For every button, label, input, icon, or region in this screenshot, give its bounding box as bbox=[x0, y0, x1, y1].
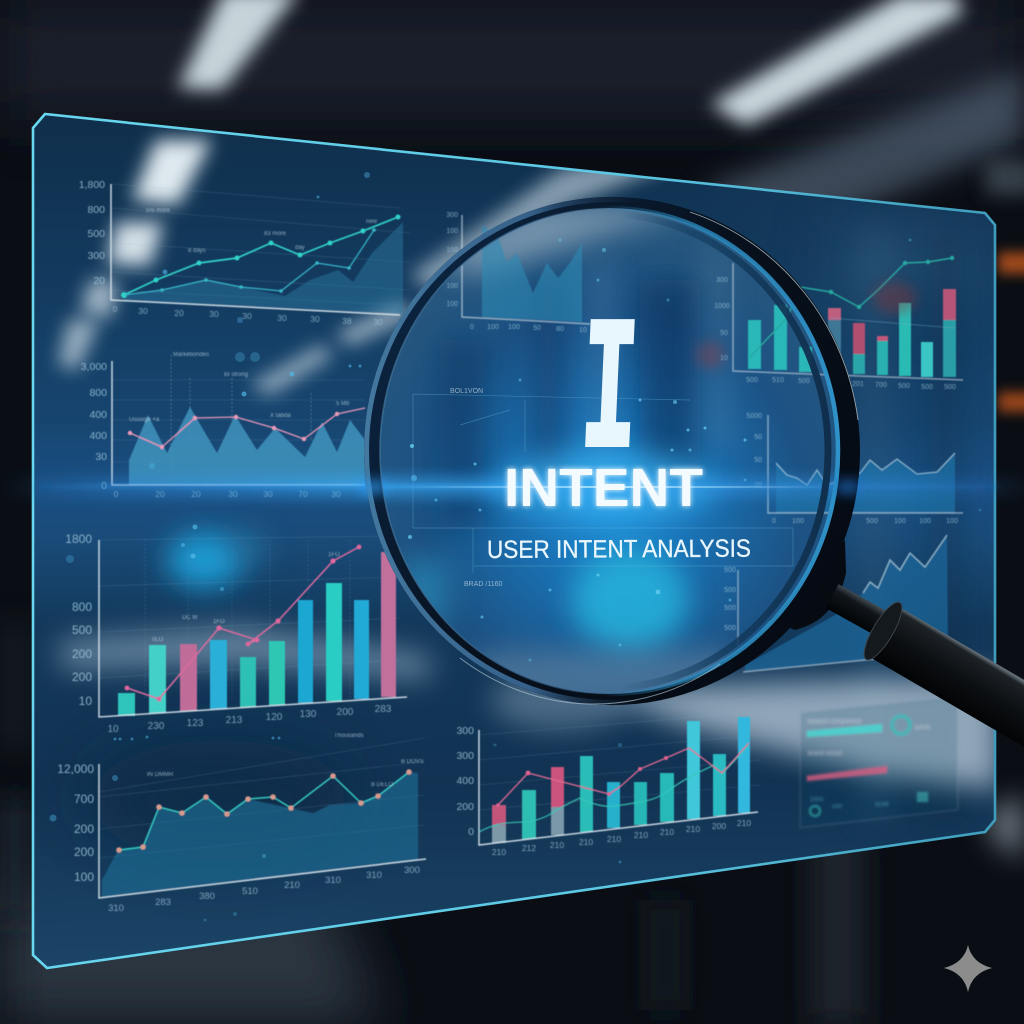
horizontal light flare bbox=[0, 476, 1024, 498]
chart: mountain area with pink line: 800 bbox=[89, 387, 107, 399]
chart: mountain area with pink line: BI strong bbox=[224, 372, 248, 378]
chart: area line with orange markers: 100 bbox=[74, 870, 94, 884]
panel: magnifier glass view: BOL1VON bbox=[450, 388, 483, 395]
mini status panel: Brand Vision bbox=[808, 751, 842, 757]
chart: lower-centre bars: 210 bbox=[737, 818, 751, 828]
bars bbox=[118, 552, 396, 716]
chart: right lower area bbox=[724, 535, 948, 672]
line series teal bbox=[121, 214, 400, 298]
chart: top-left line chart: 30 bbox=[277, 313, 287, 323]
chart: bars with pink trend: 283 bbox=[375, 704, 392, 715]
chart: right stacked bars: 300 bbox=[716, 277, 728, 284]
chart: bars with pink trend: 213 bbox=[226, 715, 243, 726]
chart: lower-centre bars: 210 bbox=[492, 847, 506, 857]
chart: right stacked bars: 1000 bbox=[714, 303, 730, 310]
chart: area line with orange markers bbox=[57, 738, 426, 914]
chart: right stacked bars: 510 bbox=[772, 377, 784, 384]
chart: bars with pink trend: 0LO bbox=[152, 637, 164, 643]
teal curve bbox=[479, 745, 749, 832]
mini status panel: 1000 bbox=[810, 797, 824, 803]
chart: top-left line chart: 30 bbox=[310, 314, 320, 324]
chart: top-left line chart: 300 bbox=[87, 250, 105, 262]
chart: area line with orange markers: IN DMMR bbox=[147, 772, 174, 778]
chart: area line with orange markers: 210 bbox=[284, 880, 300, 891]
chart: top-left line chart: 20 bbox=[174, 308, 184, 318]
chart: top-left line chart: new bbox=[366, 219, 378, 225]
chart: bars with pink trend: 200 bbox=[337, 707, 354, 718]
chart: top-left line chart: 800 bbox=[87, 204, 105, 216]
chart: mountain area with pink line: 30 bbox=[331, 489, 341, 499]
chart: bars with pink trend: 120 bbox=[266, 712, 283, 723]
pink line bbox=[496, 743, 749, 807]
chart: right middle area: 100 bbox=[792, 518, 804, 525]
chart: area line with orange markers: 310 bbox=[366, 870, 382, 881]
chart: mountain area with pink line bbox=[81, 352, 365, 499]
panel reflections bbox=[58, 140, 1000, 860]
chart: lower-centre bars: 200 bbox=[456, 801, 474, 813]
chart: mountain area with pink line: 30 bbox=[228, 489, 238, 499]
chart: lens top-centre area: 80 bbox=[556, 326, 564, 333]
chart: mountain area with pink line: 20 bbox=[191, 489, 201, 499]
chart: right middle area: 0 bbox=[772, 518, 776, 525]
chart: area line with orange markers: 380 bbox=[199, 891, 215, 902]
chart: top-left line chart: 8 days bbox=[188, 248, 206, 254]
lens blurred background bbox=[400, 205, 730, 710]
bars bbox=[748, 289, 956, 377]
chart: lens top-centre area: 100 bbox=[446, 228, 458, 235]
mini status panel: location comparison bbox=[808, 719, 861, 725]
pink line bbox=[128, 408, 365, 449]
chart: top-left line chart bbox=[79, 179, 410, 327]
chart: right middle area: 500 bbox=[866, 518, 878, 525]
orange blurred lights bbox=[998, 252, 1024, 274]
chart: top-left line chart: 1,800 bbox=[79, 179, 105, 191]
magnifier handle bbox=[770, 540, 1024, 740]
panel: magnifier glass view bbox=[380, 205, 838, 710]
chart: lower-centre bars: 210 bbox=[607, 834, 621, 844]
chart: bars with pink trend: 1800 bbox=[65, 532, 92, 546]
cyan inner arc bbox=[380, 208, 838, 694]
chart: bars with pink trend: 230 bbox=[148, 721, 165, 732]
mini status panel: SUM bbox=[875, 802, 888, 808]
thin highlight bbox=[690, 212, 858, 420]
chart: right stacked bars: 500 bbox=[921, 384, 933, 391]
chart: bars with pink trend: 200 bbox=[72, 670, 92, 684]
hub collar bbox=[770, 540, 846, 630]
italic slab I glyph: I bbox=[577, 288, 642, 502]
dark inner bevel bbox=[384, 214, 828, 688]
neck bbox=[832, 596, 884, 625]
chart: mountain area with pink line: Marketiondes bbox=[173, 352, 209, 358]
chart: lens top-centre area: 100 bbox=[508, 324, 520, 331]
chart: right middle area: 5000 bbox=[746, 413, 762, 420]
ceiling light left bbox=[178, 0, 300, 90]
mini status panel: DATA bbox=[915, 725, 930, 731]
chart: mountain area with pink line: 20 bbox=[155, 489, 165, 499]
chart: area line with orange markers: 300 bbox=[404, 865, 420, 876]
chart: lens top-centre area: 0 bbox=[470, 324, 474, 331]
chart: right lower area: 500 bbox=[724, 605, 736, 612]
chart: lower-centre bars: 210 bbox=[634, 830, 648, 840]
teal line bbox=[750, 256, 954, 357]
chart: lower-centre bars: 210 bbox=[550, 840, 564, 850]
chart: area line with orange markers: 310 bbox=[325, 875, 341, 886]
chart: bars with pink trend: 800 bbox=[72, 600, 92, 614]
chart: lens top-centre area bbox=[446, 212, 590, 334]
line with markers bbox=[116, 769, 412, 853]
chart: right stacked bars: 500 bbox=[798, 378, 810, 385]
chart: lower-centre bars: 300 bbox=[456, 750, 474, 762]
chart: area line with orange markers: 510 bbox=[242, 886, 258, 897]
chart: area line with orange markers: 700 bbox=[74, 792, 94, 806]
chart: top-left line chart: 5% more bbox=[146, 208, 171, 214]
chart: area line with orange markers: 200 bbox=[74, 845, 94, 859]
chart: mountain area with pink line: 30 bbox=[95, 451, 107, 463]
chart: lower-centre bars bbox=[456, 712, 760, 857]
chart: right middle area: 50 bbox=[754, 457, 762, 464]
chart: right stacked bars bbox=[714, 256, 963, 391]
teal status bar bbox=[807, 724, 882, 737]
chart: bars with pink trend: 130 bbox=[300, 709, 317, 720]
chart: lower-centre bars: 210 bbox=[660, 827, 674, 837]
chart: right stacked bars: 700 bbox=[875, 382, 887, 389]
chart: top-left line chart: 38 bbox=[342, 316, 352, 326]
chart: right middle area bbox=[746, 413, 963, 525]
panel: glass dashboard bbox=[33, 114, 1000, 968]
INTENT heading: INTENT bbox=[504, 458, 703, 518]
icon: sparkle watermark bbox=[944, 945, 992, 992]
chart: right middle area: 100 bbox=[919, 518, 931, 525]
chart: lens top-centre area: 300 bbox=[446, 212, 458, 219]
chart: lower-centre bars: 0 bbox=[468, 826, 474, 838]
chart: bars with pink trend: DC M bbox=[182, 615, 197, 621]
chart: right stacked bars: 50 bbox=[720, 330, 728, 337]
chart: top-left line chart: 30 bbox=[373, 317, 383, 327]
chart: mountain area with pink line: 70 bbox=[298, 489, 308, 499]
chart: area line with orange markers: B DELO bbox=[371, 782, 393, 788]
chart: lower-centre bars: 212 bbox=[522, 843, 536, 853]
chart: area line with orange markers: B DOVS bbox=[401, 759, 424, 765]
chart: mountain area with pink line: 5 Mb bbox=[336, 401, 350, 407]
panel: magnifier glass view: BRAD /1160 bbox=[464, 581, 502, 588]
chart: right middle area: 100 bbox=[946, 518, 958, 525]
chart: bars with pink trend: Thousands bbox=[334, 733, 364, 739]
mini status panel bbox=[800, 696, 958, 828]
chart: bars with pink trend bbox=[65, 532, 407, 739]
chart: bars with pink trend: 1FO bbox=[328, 552, 340, 558]
chart: right stacked bars: 500 bbox=[944, 384, 956, 391]
lens particles bbox=[408, 238, 746, 662]
chart: top-left line chart: 0 bbox=[113, 304, 118, 314]
chart: lens top-centre area: 100 bbox=[446, 283, 458, 290]
bars bbox=[492, 717, 750, 843]
chart: top-left line chart: day bbox=[295, 245, 305, 251]
chart: right middle area: 20 bbox=[754, 482, 762, 489]
steel bevel left bbox=[366, 200, 858, 702]
panel particles bbox=[50, 172, 982, 922]
ring gauge bbox=[892, 716, 910, 734]
chart: area line with orange markers: 12,000 bbox=[57, 762, 94, 776]
chart: right lower area: 500 bbox=[724, 567, 736, 574]
lens text group bbox=[487, 288, 751, 564]
chart: lens top-centre area: 100 bbox=[487, 324, 499, 331]
chart: area line with orange markers: 200 bbox=[74, 822, 94, 836]
chart: lower-centre bars: 200 bbox=[712, 821, 726, 831]
chart: lower-centre bars: 210 bbox=[686, 824, 700, 834]
chart: right middle area: 100 bbox=[894, 518, 906, 525]
chart: bars with pink trend: 200 bbox=[72, 647, 92, 661]
chart: lower-centre bars: 400 bbox=[456, 775, 474, 787]
chart: right stacked bars: 500 bbox=[746, 377, 758, 384]
chart: lens top-centre area: 10 bbox=[579, 327, 587, 334]
chart: top-left line chart: 30 bbox=[242, 311, 252, 321]
chart: right stacked bars: 10 bbox=[720, 355, 728, 362]
chart: lower-centre bars: 210 bbox=[579, 837, 593, 847]
chart: top-left line chart: 30 bbox=[209, 309, 219, 319]
chart: right lower area: 500 bbox=[724, 587, 736, 594]
chart: area line with orange markers: 310 bbox=[108, 903, 124, 914]
subtitle: USER INTENT ANALYSIS bbox=[487, 535, 751, 564]
lens wireframes bbox=[413, 394, 793, 573]
line series blue bbox=[124, 228, 376, 295]
chart: mountain area with pink line: 3,000 bbox=[81, 361, 107, 373]
chart: lower-centre bars: 300 bbox=[456, 725, 474, 737]
chart: mountain area with pink line: 0 bbox=[101, 480, 107, 492]
chart: lens top-centre area: 100 bbox=[446, 247, 458, 254]
chart: mountain area with pink line: 400 bbox=[89, 409, 107, 421]
chart: mountain area with pink line: Ususige +a bbox=[129, 417, 160, 423]
chart: lens top-centre area: 50 bbox=[533, 325, 541, 332]
pink trend line bbox=[125, 545, 361, 701]
chart: mountain area with pink line: 30 bbox=[263, 489, 273, 499]
chart: bars with pink trend: 10 bbox=[79, 694, 92, 708]
chart: bars with pink trend: 10 bbox=[107, 724, 119, 735]
chart: top-left line chart: 83 more bbox=[264, 231, 287, 237]
grip cap bbox=[858, 598, 908, 664]
chart: mountain area with pink line: 400 bbox=[89, 430, 107, 442]
magnifier ring bbox=[362, 197, 860, 705]
chart: mountain area with pink line: 0 bbox=[114, 489, 119, 499]
mini status panel: 500 bbox=[832, 804, 843, 810]
chart: area line with orange markers: 283 bbox=[155, 897, 171, 908]
ceiling light right bbox=[710, 0, 962, 126]
chart: right stacked bars: 500 bbox=[898, 383, 910, 390]
chart: bars with pink trend: 1FO bbox=[213, 619, 225, 625]
chart: top-left line chart: 500 bbox=[87, 228, 105, 240]
chart: bars with pink trend: 500 bbox=[72, 623, 92, 637]
chart: right middle area: 50 bbox=[754, 434, 762, 441]
chart: bars with pink trend: 123 bbox=[187, 718, 204, 729]
grip bbox=[886, 633, 1024, 740]
chart: right stacked bars: 201 bbox=[852, 381, 864, 388]
chart: mountain area with pink line: X tabda bbox=[270, 413, 291, 419]
chart: top-left line chart: 20 bbox=[93, 275, 105, 287]
chart: right lower area: 500 bbox=[724, 625, 736, 632]
chart: top-left line chart: 30 bbox=[138, 306, 148, 316]
pink status bar bbox=[807, 766, 887, 781]
chart: lens top-centre area: 100 bbox=[446, 301, 458, 308]
